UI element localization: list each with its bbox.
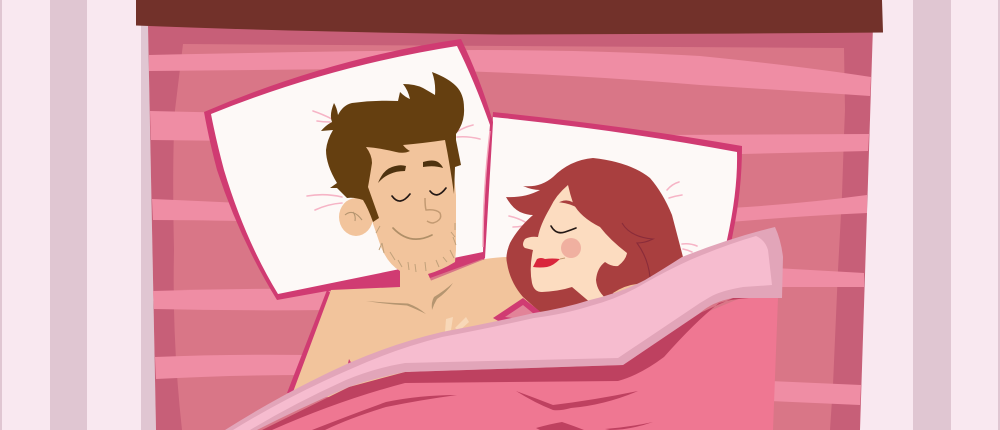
blanket body bbox=[262, 297, 778, 430]
bed mattress bbox=[148, 26, 873, 430]
eyebrow bbox=[561, 201, 579, 208]
ear bbox=[339, 198, 373, 236]
pillow corner under woman bbox=[493, 298, 542, 322]
blanket fold inner bbox=[233, 236, 772, 430]
face bbox=[523, 185, 627, 304]
hair bbox=[506, 158, 690, 312]
eyes closed bbox=[392, 188, 446, 201]
man: torso bbox=[287, 257, 540, 400]
nose bbox=[425, 198, 441, 223]
bed stripes bbox=[149, 50, 871, 405]
face and neck bbox=[362, 132, 456, 290]
headboard bbox=[136, 0, 883, 34]
eyebrows bbox=[378, 160, 443, 183]
pillow: woman's bbox=[480, 112, 742, 300]
blanket wrinkles bbox=[312, 391, 653, 430]
lips bbox=[533, 258, 560, 268]
woman: head bbox=[506, 158, 690, 312]
pillow seam bbox=[483, 131, 490, 247]
shoulder bbox=[613, 284, 640, 298]
pillow: man's bbox=[204, 39, 493, 300]
chest lines bbox=[366, 283, 453, 314]
whiskers: woman's hair motion bbox=[509, 182, 697, 252]
whiskers: man's hair motion bbox=[307, 111, 480, 210]
cheek bbox=[561, 238, 581, 258]
hair strands bbox=[622, 223, 653, 277]
stubble bbox=[376, 223, 456, 272]
blanket bbox=[225, 227, 783, 430]
man: head bbox=[321, 72, 464, 290]
smile bbox=[393, 228, 432, 239]
blanket fold outer bbox=[225, 227, 783, 430]
hair bbox=[321, 72, 464, 222]
blanket shadow under fold bbox=[262, 298, 749, 430]
eye closed bbox=[551, 226, 576, 233]
hand fingers bbox=[445, 317, 469, 332]
